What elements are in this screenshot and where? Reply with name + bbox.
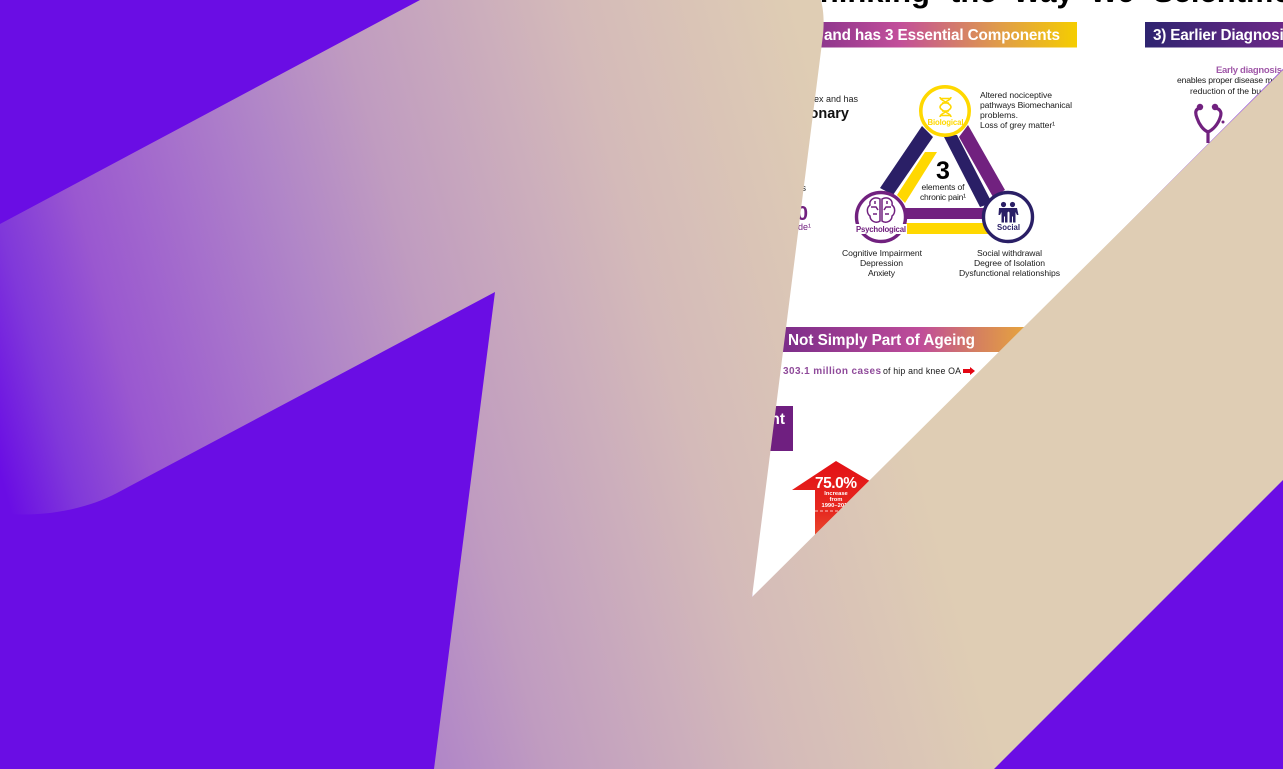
text: biological factors: Altered nociceptive — [980, 90, 1052, 100]
text: social factors: Dysfunctional relationships — [959, 268, 1060, 278]
arrow: red pointer — [963, 367, 975, 375]
icon: brain — [867, 198, 895, 222]
text: biological factors — [980, 90, 1072, 130]
chart: red increase arrow: from — [830, 497, 842, 503]
icon: stethoscope — [1196, 104, 1224, 143]
chart: red increase arrow: 75.0% — [815, 475, 857, 492]
heading: 3 essential components — [790, 22, 1077, 48]
heading: earlier diagnosis — [1145, 22, 1283, 48]
text: chronic pain intro: 0 — [797, 203, 808, 225]
heading: not simply part of ageing: Not Simply Part of Ageing — [788, 332, 975, 349]
box: purple label: nt — [771, 411, 785, 428]
text: psychological factors: Depression — [860, 258, 903, 268]
text: chronic pain intro: s — [802, 183, 806, 193]
icon: two people — [998, 202, 1018, 222]
text: social factors: Degree of Isolation — [974, 258, 1045, 268]
text: chronic pain intro: ex and has — [814, 94, 858, 104]
centre label: 3 elements: chronic pain¹ — [920, 192, 966, 202]
text: social factors: Social withdrawal — [977, 248, 1042, 258]
panel: essential components — [790, 22, 1077, 278]
panel: earlier diagnosis — [1145, 22, 1283, 143]
panel: not simply part of ageing — [740, 327, 1040, 560]
text: chronic pain intro: de¹ — [798, 222, 811, 232]
chart: red increase arrow — [792, 461, 885, 560]
text: psychological factors: Cognitive Impairment — [842, 248, 923, 258]
chart: red increase arrow: Increase — [824, 491, 849, 497]
node: psychological — [855, 192, 907, 242]
centre label: 3 elements — [920, 157, 966, 202]
text: early diagnosis: Early diagnosis — [1216, 65, 1282, 76]
icon: dna — [940, 97, 951, 117]
text: 303.1 million cases: 303.1 million cases — [783, 366, 881, 377]
text: social factors — [959, 248, 1060, 278]
text: early diagnosis — [1177, 65, 1282, 96]
text: 303.1 million cases: of hip and knee OA — [883, 366, 961, 376]
diagram: biopsychosocial triangle — [855, 87, 1032, 242]
box: purple label — [740, 406, 793, 451]
text: chronic pain intro: onary — [810, 106, 849, 122]
text: psychological factors: Anxiety — [868, 268, 896, 278]
centre label: 3 elements: elements of — [922, 182, 965, 192]
text: early diagnosis: enables proper disease ma — [1177, 75, 1277, 85]
node: biological — [921, 87, 969, 135]
text: biological factors: pathways Biomechanical — [980, 100, 1072, 110]
white infographic window — [752, 0, 1283, 600]
text: chronic pain intro — [797, 94, 858, 232]
heading: 3 essential components: and has 3 Essential Components — [824, 27, 1060, 44]
node: social — [984, 192, 1032, 242]
node: social: Social — [997, 223, 1020, 232]
heading: not simply part of ageing — [770, 327, 1040, 352]
title — [820, 0, 1283, 9]
text: biological factors: problems. — [980, 110, 1018, 120]
text: psychological factors — [842, 248, 923, 278]
text: biological factors: Loss of grey matter¹ — [980, 120, 1055, 130]
chart: red increase arrow: 1990–2019 — [821, 503, 851, 509]
node: psychological: Psychological — [856, 225, 906, 234]
centre label: 3 elements: 3 — [936, 157, 950, 185]
text: early diagnosis: reduction of the bu — [1190, 86, 1261, 96]
node: biological: Biological — [928, 118, 964, 127]
text: 303.1 million cases — [783, 366, 961, 377]
